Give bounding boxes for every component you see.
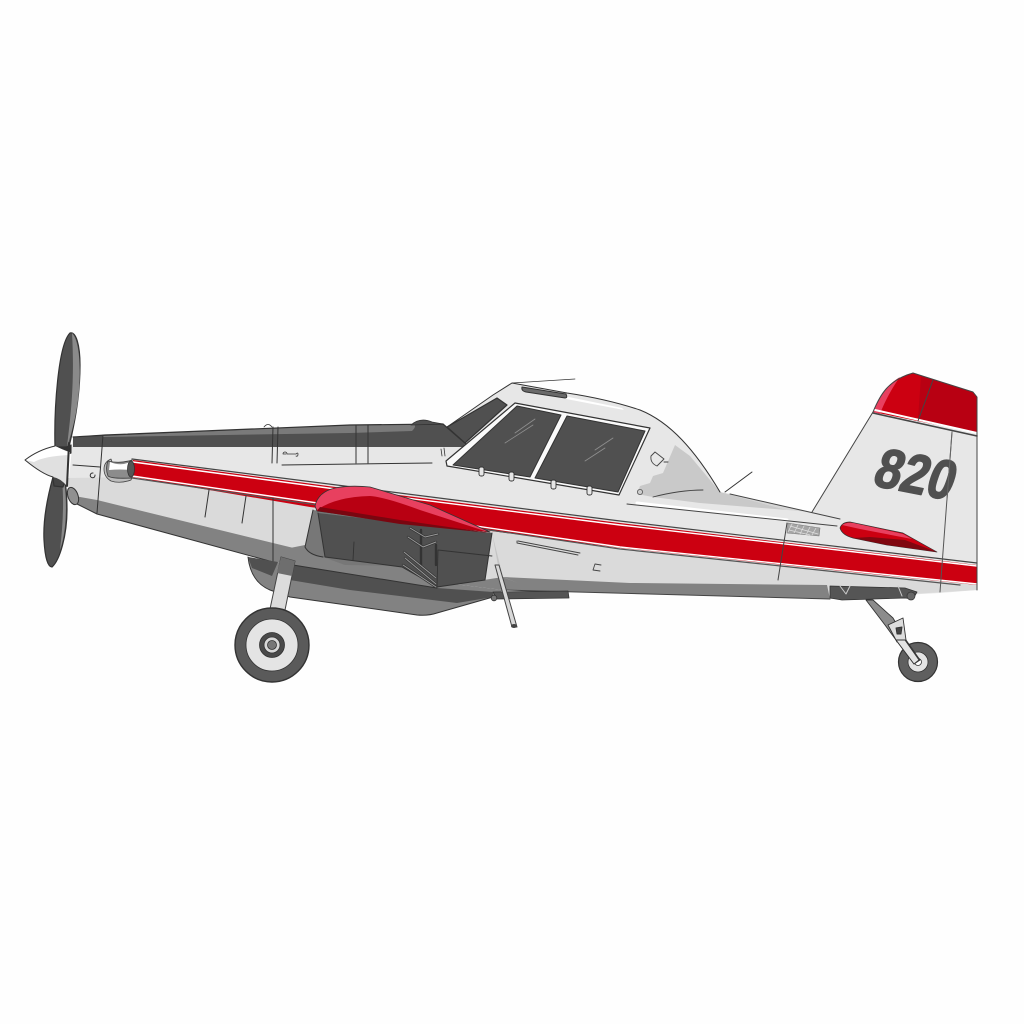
belly pod — [248, 545, 503, 615]
main wheel — [235, 608, 309, 682]
tail wheel — [898, 642, 938, 682]
flap hinge linkage — [403, 528, 438, 587]
cowling panel lines — [65, 425, 445, 562]
main landing gear strut — [270, 557, 295, 610]
upper rear fuselage lines — [627, 494, 840, 580]
antenna — [725, 472, 752, 492]
belly grey band — [67, 488, 830, 599]
canopy outline and roof — [447, 379, 720, 492]
under-wing bar — [491, 591, 569, 601]
flap rod — [495, 565, 517, 628]
canopy shade — [637, 445, 810, 512]
wing root dark panel — [305, 510, 492, 587]
fuselage side details — [517, 541, 601, 571]
cabin window left — [453, 406, 561, 477]
propeller — [44, 333, 80, 567]
cabin window right — [535, 416, 645, 492]
exhaust stack — [104, 459, 134, 482]
horizontal stabilizer — [840, 522, 937, 552]
hatch patch — [787, 523, 820, 536]
spinner — [25, 446, 70, 486]
cabin window frame — [446, 403, 650, 495]
window latches — [479, 467, 592, 495]
tail fin panel lines and red cap — [812, 373, 977, 592]
windscreen front window — [447, 398, 507, 443]
tail gear housing — [830, 586, 917, 600]
cowling top light wedge — [103, 424, 415, 437]
wing root shadow — [492, 533, 518, 583]
tail rudder overlay line — [947, 432, 952, 500]
tail gear leg — [866, 600, 920, 664]
lower fuselage shade — [68, 477, 977, 599]
cowling top dark band — [73, 424, 465, 447]
roof vent — [522, 387, 567, 398]
red stripe with pinstripes — [132, 459, 977, 585]
wing cross-section in red — [315, 486, 490, 533]
fuselage and tail fin body — [67, 373, 977, 599]
tail number 820: 820 — [867, 438, 965, 512]
